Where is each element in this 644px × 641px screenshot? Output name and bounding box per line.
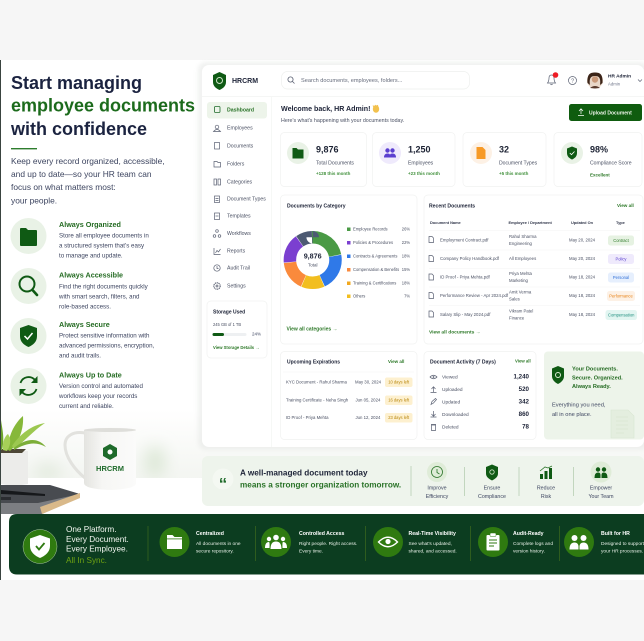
panel: document activity: Document Activity (7 Days) bbox=[430, 359, 496, 365]
feature: always organized: Store all employee documents in bbox=[59, 233, 149, 240]
legend: 7% bbox=[404, 293, 410, 298]
table row: performance review bbox=[429, 290, 635, 302]
table row: performance review: May 18, 2024 bbox=[569, 293, 596, 298]
table row: company policy handbook bbox=[429, 254, 634, 264]
intro text: and up to date—so your HR team can bbox=[11, 169, 152, 179]
feature: always accessible: role-based access. bbox=[59, 304, 111, 311]
panel: upcoming expirations bbox=[280, 352, 417, 440]
table row: employment contract: Rahul Sharma bbox=[509, 234, 537, 239]
activity: downloaded: Downloaded bbox=[442, 412, 469, 418]
table row: salary slip: Finance bbox=[509, 316, 525, 321]
donut chart bbox=[290, 237, 336, 283]
legend: Employee Records bbox=[353, 226, 388, 231]
upload document button: Upload Document bbox=[589, 110, 632, 116]
panel: storage used: 24% bbox=[252, 332, 261, 337]
stat card: employees: Employees bbox=[408, 160, 434, 166]
icon: quote mark bbox=[212, 468, 234, 493]
icon: help: ? bbox=[571, 78, 574, 84]
intro text: focus on what matters most: bbox=[11, 182, 116, 192]
activity: deleted bbox=[431, 424, 530, 431]
sidebar navigation: Reports bbox=[227, 248, 246, 254]
sidebar navigation: Categories bbox=[227, 179, 252, 185]
panel: storage used: 245 GB of 1 TB bbox=[213, 322, 241, 327]
table row: performance review: Performance bbox=[609, 293, 633, 298]
benefit: empower your team bbox=[588, 462, 614, 500]
table row: employment contract bbox=[429, 234, 634, 246]
stat card: compliance score bbox=[554, 132, 642, 186]
activity: viewed: 1,240 bbox=[514, 374, 530, 381]
panel: documents by category: Documents by Category bbox=[287, 203, 346, 209]
table row: employment contract: Engineering bbox=[509, 241, 533, 246]
feature: built for hr: Designed to support bbox=[601, 541, 644, 547]
legend: Others bbox=[353, 293, 365, 298]
feature: real-time visibility: See what's updated, bbox=[408, 541, 452, 547]
icon: HRCRM logo: HRCRM bbox=[232, 78, 258, 85]
feature: always secure: advanced permissions, encryption, bbox=[59, 343, 155, 350]
table row: id proof: Personal bbox=[613, 275, 629, 280]
legend: Contracts & Agreements bbox=[353, 253, 397, 258]
stat card: total documents: +128 this month bbox=[316, 171, 351, 176]
feature: built for hr: your HR processes. bbox=[601, 548, 643, 554]
panel: documents by category bbox=[280, 195, 417, 344]
sidebar navigation: Workflows bbox=[227, 231, 251, 237]
feature: audit-ready bbox=[478, 527, 553, 557]
feature: always organized: Always Organized bbox=[59, 220, 121, 229]
table row: company policy handbook: Policy bbox=[616, 256, 627, 261]
tagline: Every Document. bbox=[66, 535, 129, 544]
stat card: total documents bbox=[280, 132, 366, 186]
panel: upcoming expirations: Upcoming Expirations bbox=[287, 359, 340, 365]
feature: always up to date: workflows keep your records bbox=[58, 393, 137, 400]
search box bbox=[282, 72, 470, 89]
legend: Training & Certifications bbox=[353, 280, 396, 285]
feature: controlled access: Controlled Access bbox=[299, 531, 344, 537]
title bbox=[10, 73, 195, 139]
feature: always secure bbox=[10, 318, 155, 360]
icon: notification bell bbox=[548, 72, 558, 85]
panel: storage used: View Storage Details → bbox=[213, 345, 259, 350]
stat card: compliance score: Excellent bbox=[590, 173, 610, 178]
upload document button bbox=[569, 104, 642, 121]
table row: performance review: Amit Verma bbox=[509, 290, 532, 295]
table row: company policy handbook: Company Policy Handbook.pdf bbox=[440, 256, 500, 261]
sidebar navigation: Employees bbox=[227, 125, 253, 131]
table row: company policy handbook: All Employees bbox=[509, 256, 536, 261]
tagline: One Platform. bbox=[66, 525, 117, 534]
benefit: ensure compliance: Compliance bbox=[478, 494, 506, 500]
icon: HRCRM mug bbox=[65, 428, 136, 490]
benefit: reduce risk bbox=[537, 466, 555, 500]
stat card: document types: +5 this month bbox=[499, 171, 529, 176]
feature: always up to date: Always Up to Date bbox=[59, 370, 122, 379]
expiry row: id proof: ID Proof - Priya Mehta bbox=[286, 415, 329, 420]
welcome heading: Welcome back, HR Admin! bbox=[281, 105, 370, 113]
feature: controlled access: Right people. Right access. bbox=[299, 541, 357, 547]
sidebar navigation: Audit Trail bbox=[227, 265, 250, 271]
table row: salary slip: May 18, 2024 bbox=[569, 312, 596, 317]
panel: upcoming expirations: View all bbox=[388, 359, 404, 364]
donut chart: 9,876 bbox=[304, 251, 322, 260]
table row: id proof: Marketing bbox=[509, 278, 528, 283]
stat card: compliance score: 98% bbox=[590, 144, 608, 154]
panel: left intro bbox=[10, 73, 195, 410]
panel: recent documents: Recent Documents bbox=[429, 203, 475, 209]
feature: controlled access bbox=[261, 527, 357, 557]
stat card: document types: Document Types bbox=[499, 160, 538, 166]
feature: built for hr bbox=[564, 527, 644, 557]
panel: storage used: Storage Used bbox=[213, 309, 245, 315]
feature: always organized: to manage and update. bbox=[59, 253, 123, 260]
feature: centralized: Centralized bbox=[196, 531, 224, 537]
sidebar navigation: Settings bbox=[227, 283, 246, 289]
feature: centralized bbox=[160, 527, 241, 557]
sidebar navigation: Dashboard bbox=[227, 107, 254, 113]
activity: downloaded: 860 bbox=[519, 411, 530, 418]
banner: quote and benefits bbox=[202, 456, 644, 506]
table header bbox=[430, 220, 626, 225]
feature: always secure: Always Secure bbox=[59, 320, 110, 329]
user profile: Admin bbox=[608, 82, 621, 87]
expiry row: training certificate: Jun 05, 2024 bbox=[356, 398, 381, 403]
feature: controlled access: Every time. bbox=[299, 548, 323, 554]
icon: help bbox=[568, 76, 576, 84]
panel: bottom feature band bbox=[9, 514, 644, 574]
expiry row: kyc document: May 30, 2024 bbox=[355, 380, 382, 385]
expiry row: training certificate: 16 days left bbox=[388, 398, 410, 403]
activity: uploaded: 520 bbox=[519, 386, 530, 393]
icon: quote mark: “ bbox=[219, 474, 227, 493]
expiry row: id proof: 23 days left bbox=[388, 415, 410, 420]
feature: always organized: a structured system that's easy bbox=[59, 243, 145, 250]
stat card: employees: +23 this month bbox=[408, 171, 440, 176]
title: Start managing bbox=[11, 73, 142, 93]
legend bbox=[347, 226, 410, 298]
expiry row: kyc document: KYC Document - Rahul Sharma bbox=[286, 380, 348, 385]
welcome heading: Here's what's happening with your documents today. bbox=[281, 118, 404, 124]
user profile bbox=[587, 72, 642, 88]
panel: dashboard window bbox=[202, 65, 644, 447]
table row: employment contract: May 20, 2024 bbox=[569, 238, 596, 243]
header bar bbox=[213, 72, 642, 90]
legend: 18% bbox=[402, 280, 410, 285]
activity: uploaded: Uploaded bbox=[442, 387, 463, 393]
feature: always up to date: Version control and automated bbox=[59, 383, 143, 390]
expiry row: training certificate: Training Certificate - Neha Singh bbox=[286, 398, 349, 403]
table row: salary slip: Vikram Patel bbox=[509, 309, 533, 314]
intro text: Keep every record organized, accessible, bbox=[11, 156, 165, 166]
icon: faint document bbox=[611, 410, 634, 438]
expiry row: training certificate bbox=[286, 396, 412, 405]
donut chart: Total bbox=[308, 263, 317, 268]
icon: waving hand bbox=[373, 105, 379, 113]
feature: always accessible: with smart search, filters, and bbox=[58, 294, 140, 301]
legend: 22% bbox=[402, 240, 410, 245]
table row: performance review: Performance Review - Apr 2024.pdf bbox=[440, 293, 509, 298]
benefit: improve efficiency bbox=[426, 462, 449, 500]
activity: viewed: Viewed bbox=[442, 374, 458, 380]
stat card: document types bbox=[463, 132, 546, 186]
stat card: total documents: Total Documents bbox=[316, 160, 354, 166]
icon: HRCRM mug: HRCRM bbox=[96, 464, 124, 473]
panel: your documents promo: all in one place. bbox=[552, 412, 592, 418]
expiry row: id proof bbox=[286, 413, 412, 422]
table header: Type bbox=[616, 220, 626, 225]
stat card: document types: 32 bbox=[499, 144, 509, 154]
panel: document activity: View all bbox=[515, 359, 531, 364]
table row: employment contract: Contract bbox=[613, 238, 630, 243]
table header: Updated On bbox=[571, 220, 594, 225]
activity: updated: Updated bbox=[442, 399, 460, 405]
activity: uploaded bbox=[430, 386, 530, 393]
panel: your documents promo bbox=[544, 352, 644, 440]
panel: recent documents: View all documents → bbox=[429, 329, 481, 335]
legend: 26% bbox=[402, 226, 410, 231]
search box: Search documents, employees, folders... bbox=[301, 78, 403, 84]
title: employee documents bbox=[11, 95, 195, 115]
panel: your documents promo: Always Ready. bbox=[572, 384, 611, 390]
title: with confidence bbox=[10, 119, 147, 139]
activity: updated: 342 bbox=[519, 399, 530, 406]
benefit: ensure compliance: Ensure bbox=[484, 485, 500, 491]
activity: viewed bbox=[430, 374, 530, 381]
feature: centralized: All documents in one bbox=[196, 541, 241, 547]
tagline bbox=[23, 525, 129, 565]
table row: salary slip: Compensation bbox=[608, 312, 635, 317]
background photo: desk with plant, mug and notebook bbox=[1, 410, 644, 515]
feature: audit-ready: Audit-Ready bbox=[513, 531, 544, 537]
quote text bbox=[240, 469, 401, 490]
welcome heading bbox=[281, 105, 404, 124]
tagline: All In Sync. bbox=[66, 556, 107, 565]
feature: always up to date bbox=[10, 368, 143, 410]
table row: employment contract: Employment Contract.pdf bbox=[440, 238, 489, 243]
tagline: Every Employee. bbox=[66, 545, 128, 554]
benefit: improve efficiency: Improve bbox=[427, 485, 447, 491]
legend: Policies & Procedures bbox=[353, 240, 393, 245]
feature: always accessible: Always Accessible bbox=[59, 270, 123, 279]
feature: real-time visibility: shared, and accessed. bbox=[408, 548, 457, 554]
legend: 18% bbox=[402, 253, 410, 258]
feature: always secure: and audit trails. bbox=[59, 353, 101, 360]
panel: storage used bbox=[207, 301, 267, 358]
table row: id proof: Priya Mehta bbox=[509, 271, 533, 276]
panel: recent documents bbox=[424, 195, 643, 344]
icon: HRCRM logo bbox=[213, 72, 258, 90]
activity: updated bbox=[431, 398, 530, 406]
feature: always up to date: current and reliable. bbox=[59, 403, 114, 410]
panel: your documents promo: Secure. Organized. bbox=[572, 375, 623, 381]
table row: id proof: May 18, 2024 bbox=[569, 275, 596, 280]
panel: recent documents: View all bbox=[617, 203, 634, 208]
feature: real-time visibility bbox=[373, 527, 457, 557]
quote text: A well-managed document today bbox=[240, 469, 368, 478]
sidebar navigation: Documents bbox=[227, 143, 254, 149]
panel: documents by category: View all categories → bbox=[286, 326, 338, 332]
table row: id proof: ID Proof - Priya Mehta.pdf bbox=[440, 275, 490, 280]
benefit: improve efficiency: Efficiency bbox=[426, 494, 449, 500]
legend: 15% bbox=[402, 267, 410, 272]
feature: always secure: Protect sensitive information with bbox=[59, 333, 150, 340]
table row: performance review: Sales bbox=[509, 297, 520, 302]
stat card: employees: 1,250 bbox=[408, 144, 431, 154]
benefit: ensure compliance bbox=[478, 464, 506, 500]
user profile: HR Admin bbox=[608, 73, 631, 79]
quote text: means a stronger organization tomorrow. bbox=[240, 481, 401, 490]
benefit: empower your team: Your Team bbox=[588, 494, 614, 500]
feature: centralized: secure repository. bbox=[196, 548, 234, 554]
intro text bbox=[11, 156, 165, 206]
expiry row: kyc document: 10 days left bbox=[388, 380, 410, 385]
legend: Compensation & Benefits bbox=[353, 267, 399, 272]
table row: company policy handbook: May 20, 2024 bbox=[569, 256, 596, 261]
benefit: reduce risk: Risk bbox=[541, 494, 551, 500]
table row: salary slip: Salary Slip - May 2024.pdf bbox=[440, 312, 491, 317]
table header: Employee / Department bbox=[508, 220, 552, 225]
feature: always accessible: Find the right documents quickly bbox=[59, 284, 149, 291]
panel: your documents promo: Your Documents. bbox=[572, 366, 618, 372]
feature: built for hr: Built for HR bbox=[601, 531, 630, 537]
intro text: your people. bbox=[11, 196, 57, 206]
feature: real-time visibility: Real-Time Visibility bbox=[408, 531, 456, 537]
sidebar navigation bbox=[207, 102, 267, 289]
feature: always accessible bbox=[10, 268, 149, 311]
feature: audit-ready: Complete logs and bbox=[513, 541, 553, 547]
table header: Document Name bbox=[430, 220, 462, 225]
panel: document activity bbox=[424, 352, 536, 440]
feature: audit-ready: version history. bbox=[513, 548, 545, 554]
icon: plant pot bbox=[1, 416, 46, 486]
benefit: reduce risk: Reduce bbox=[537, 485, 555, 491]
stat card: compliance score: Compliance Score bbox=[590, 160, 632, 166]
table row: id proof bbox=[429, 271, 634, 283]
panel: your documents promo: Everything you need, bbox=[552, 402, 606, 408]
sidebar navigation: Templates bbox=[227, 213, 251, 219]
activity: downloaded bbox=[430, 411, 530, 418]
benefit: empower your team: Empower bbox=[590, 485, 612, 491]
table row: salary slip bbox=[429, 309, 637, 321]
expiry row: id proof: Jun 12, 2024 bbox=[356, 415, 381, 420]
icon: notebook and pen bbox=[1, 485, 80, 514]
activity: deleted: 78 bbox=[522, 424, 530, 431]
sidebar navigation: Document Types bbox=[227, 196, 266, 202]
stat card: employees bbox=[372, 132, 455, 186]
feature: always organized bbox=[10, 218, 149, 260]
sidebar navigation: Folders bbox=[227, 161, 245, 167]
stat card: total documents: 9,876 bbox=[316, 144, 339, 154]
expiry row: kyc document bbox=[286, 378, 412, 387]
activity: deleted: Deleted bbox=[442, 424, 459, 430]
